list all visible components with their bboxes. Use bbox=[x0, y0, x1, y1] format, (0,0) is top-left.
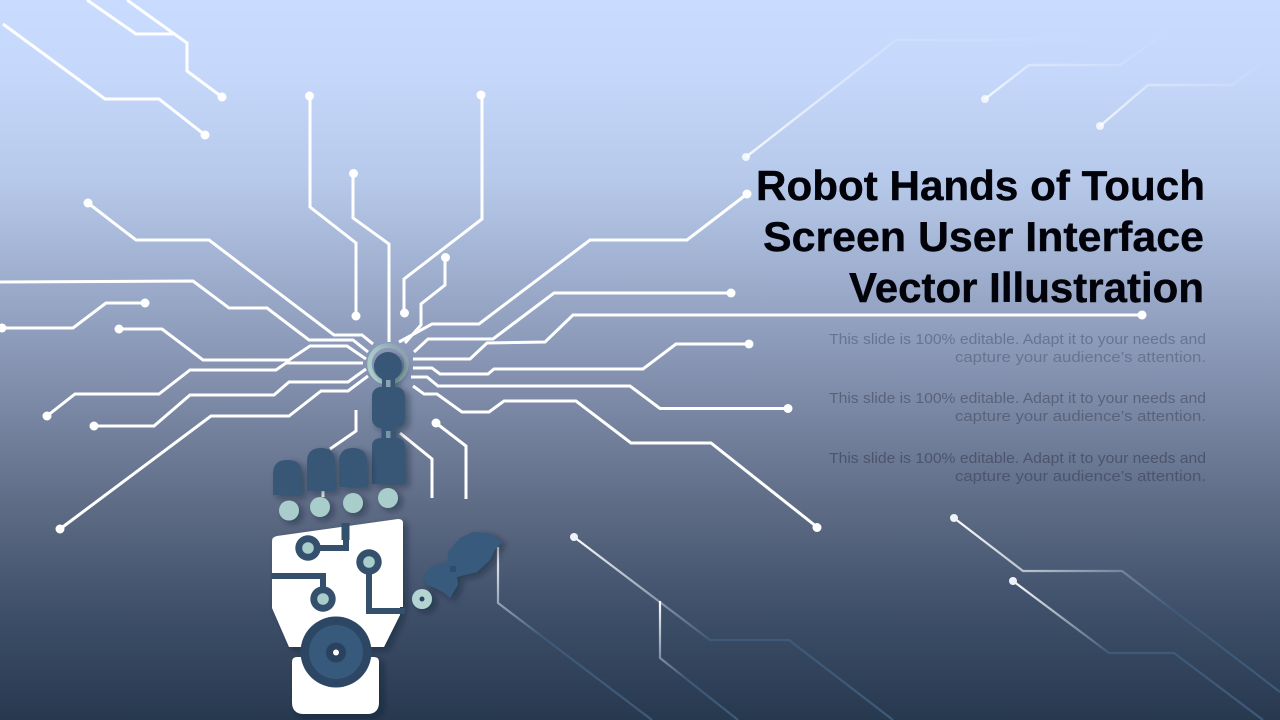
touch ring around the fingertip bbox=[370, 346, 406, 382]
circuit lines: above fingertip bbox=[305, 90, 486, 343]
circuit lines: around the hand bbox=[323, 410, 466, 499]
text block 1: This slide is 100% editable. Adapt it to your needs and bbox=[829, 332, 1206, 348]
text block 1: capture your audience’s attention. bbox=[955, 350, 1206, 366]
circuit lines: fading top right bbox=[742, 30, 1280, 161]
text block 2: This slide is 100% editable. Adapt it to your needs and bbox=[829, 391, 1206, 407]
circuit lines: left of fingertip bbox=[0, 198, 373, 534]
icon: robot thumb bbox=[412, 532, 502, 609]
text block 1 bbox=[829, 332, 1206, 366]
text block 2 bbox=[829, 391, 1206, 425]
icon: wrist block bbox=[292, 657, 379, 714]
icon: robot fingers bbox=[273, 448, 367, 495]
icon: robot index finger bbox=[372, 352, 405, 484]
title bbox=[756, 162, 1205, 311]
text block 3: capture your audience’s attention. bbox=[955, 469, 1206, 485]
circuit lines: top left corner bbox=[3, 0, 226, 140]
text block 2: capture your audience’s attention. bbox=[955, 409, 1206, 425]
circuit lines: right of fingertip bbox=[399, 190, 1146, 532]
icon: wrist joint disc bbox=[300, 616, 372, 688]
circuit lines: fading lower right bbox=[498, 514, 1280, 720]
finger joint dots bbox=[279, 488, 398, 520]
text block 3 bbox=[829, 451, 1206, 485]
icon: robot palm with circuit traces bbox=[271, 519, 405, 647]
title: Robot Hands of Touch bbox=[756, 162, 1205, 209]
text block 3: This slide is 100% editable. Adapt it to your needs and bbox=[829, 451, 1206, 467]
title: Screen User Interface bbox=[763, 213, 1204, 260]
title: Vector Illustration bbox=[849, 264, 1204, 311]
